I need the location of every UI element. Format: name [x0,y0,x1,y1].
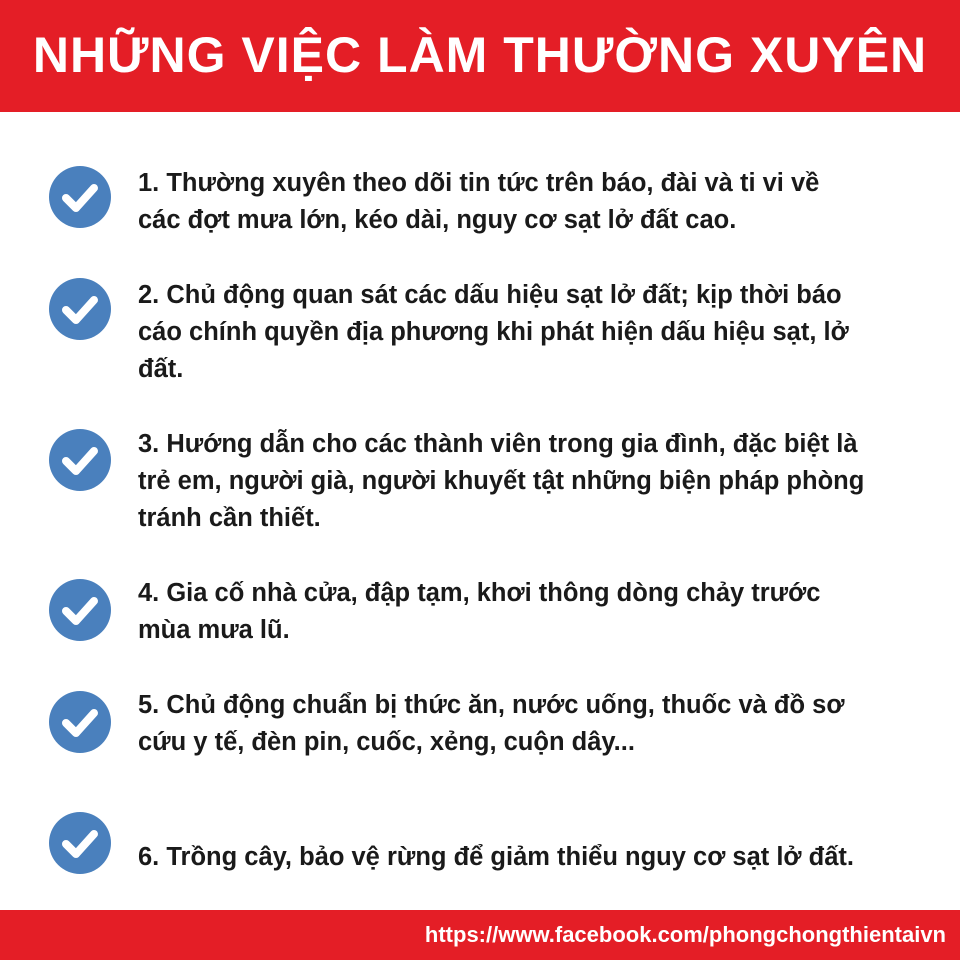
item 1 [138,169,819,234]
icon: check 5 [49,691,111,753]
item 5 [138,691,844,756]
item 3: trẻ em, người già, người khuyết tật những biện pháp phòng [138,467,864,495]
item 2: 2. Chủ động quan sát các dấu hiệu sạt lở đất; kịp thời báo [138,281,842,309]
icon: check 3 [49,429,111,491]
item 3: 3. Hướng dẫn cho các thành viên trong gia đình, đặc biệt là [138,430,858,458]
icon: check 4 [49,579,111,641]
item 2: đất. [138,355,183,383]
icon: check 1 [49,166,111,228]
footer [0,910,960,960]
item 1: các đợt mưa lớn, kéo dài, nguy cơ sạt lở đất cao. [138,206,736,234]
item 1: 1. Thường xuyên theo dõi tin tức trên báo, đài và ti vi về [138,169,819,197]
item 6: 6. Trồng cây, bảo vệ rừng để giảm thiểu nguy cơ sạt lở đất. [138,843,854,871]
icon: check 6 [49,812,111,874]
item 2: cáo chính quyền địa phương khi phát hiện dấu hiệu sạt, lở [138,318,849,346]
item 5: 5. Chủ động chuẩn bị thức ăn, nước uống, thuốc và đồ sơ [138,691,844,719]
item 4 [138,579,820,644]
title: NHỮNG VIỆC LÀM THƯỜNG XUYÊN [33,27,927,83]
item 3 [138,429,864,532]
footer url: https://www.facebook.com/phongchongthientaivn [425,922,946,947]
title [0,0,960,112]
item 4: mùa mưa lũ. [138,616,290,644]
icon: check 2 [49,278,111,340]
item 2 [138,281,849,383]
item 3: tránh cần thiết. [138,504,321,532]
item 4: 4. Gia cố nhà cửa, đập tạm, khơi thông dòng chảy trước [138,579,820,607]
item 5: cứu y tế, đèn pin, cuốc, xẻng, cuộn dây... [138,728,635,756]
